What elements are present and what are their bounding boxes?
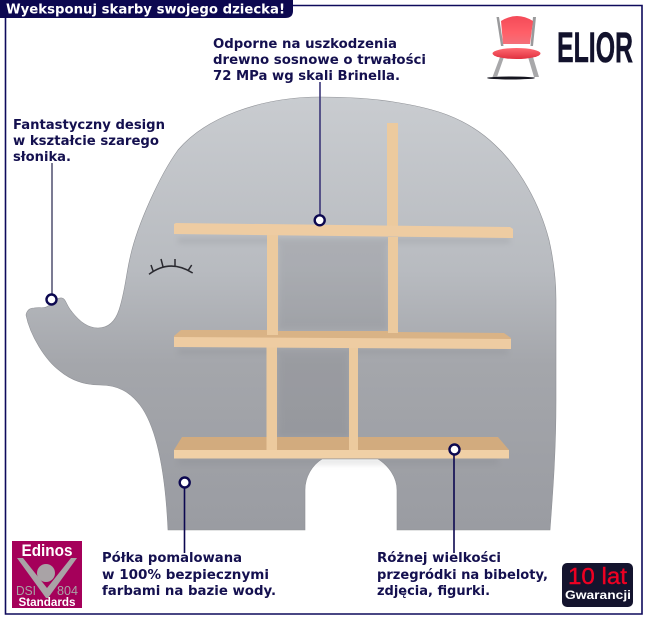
badge: 10 year warranty (562, 563, 633, 607)
icon: red chair (487, 16, 540, 80)
elephant shelf (26, 97, 556, 530)
callout: compartments: przegródki na bibeloty, (377, 567, 548, 583)
callout: paint (102, 478, 276, 599)
callout: wood: drewno sosnowe o trwałości (213, 52, 426, 68)
badge: Edinos standards: Standards (18, 597, 76, 609)
callout: design (13, 118, 165, 304)
callout: design: w kształcie szarego (13, 134, 159, 149)
badge: Edinos standards: 804 (57, 583, 78, 598)
callout: compartments: zdjęcia, figurki. (377, 584, 490, 599)
top shelf (174, 223, 513, 238)
brand logo: Elior (487, 16, 633, 80)
callout: paint: Półka pomalowana (102, 550, 242, 566)
callout: paint: w 100% bezpiecznymi (102, 568, 269, 583)
badge: 10 year warranty: Gwarancji (565, 590, 631, 602)
icon: closed eye (149, 259, 193, 274)
badge: 10 year warranty: 10 lat (568, 563, 628, 589)
callout: wood: 72 MPa wg skali Brinella. (213, 69, 400, 84)
callout: compartments: Różnej wielkości (377, 550, 501, 566)
callout: compartments (377, 444, 548, 599)
badge: Edinos standards: DSI (16, 583, 36, 598)
title banner: Wyeksponuj skarby swojego dziecka! (6, 2, 285, 18)
callout: wood: Odporne na uszkodzenia (213, 37, 397, 52)
bottom shelf (174, 437, 509, 458)
elephant body (26, 97, 556, 530)
callout: paint: farbami na bazie wody. (102, 584, 276, 599)
badge: Edinos standards: Edinos (22, 541, 72, 560)
shelf shadows (178, 238, 510, 464)
callout: design: słonika. (13, 150, 71, 165)
middle shelf (174, 330, 511, 349)
callout: wood (213, 37, 426, 225)
uprights (266, 123, 398, 450)
callout: design: Fantastyczny design (13, 118, 165, 133)
badge: Edinos standards (12, 541, 82, 609)
